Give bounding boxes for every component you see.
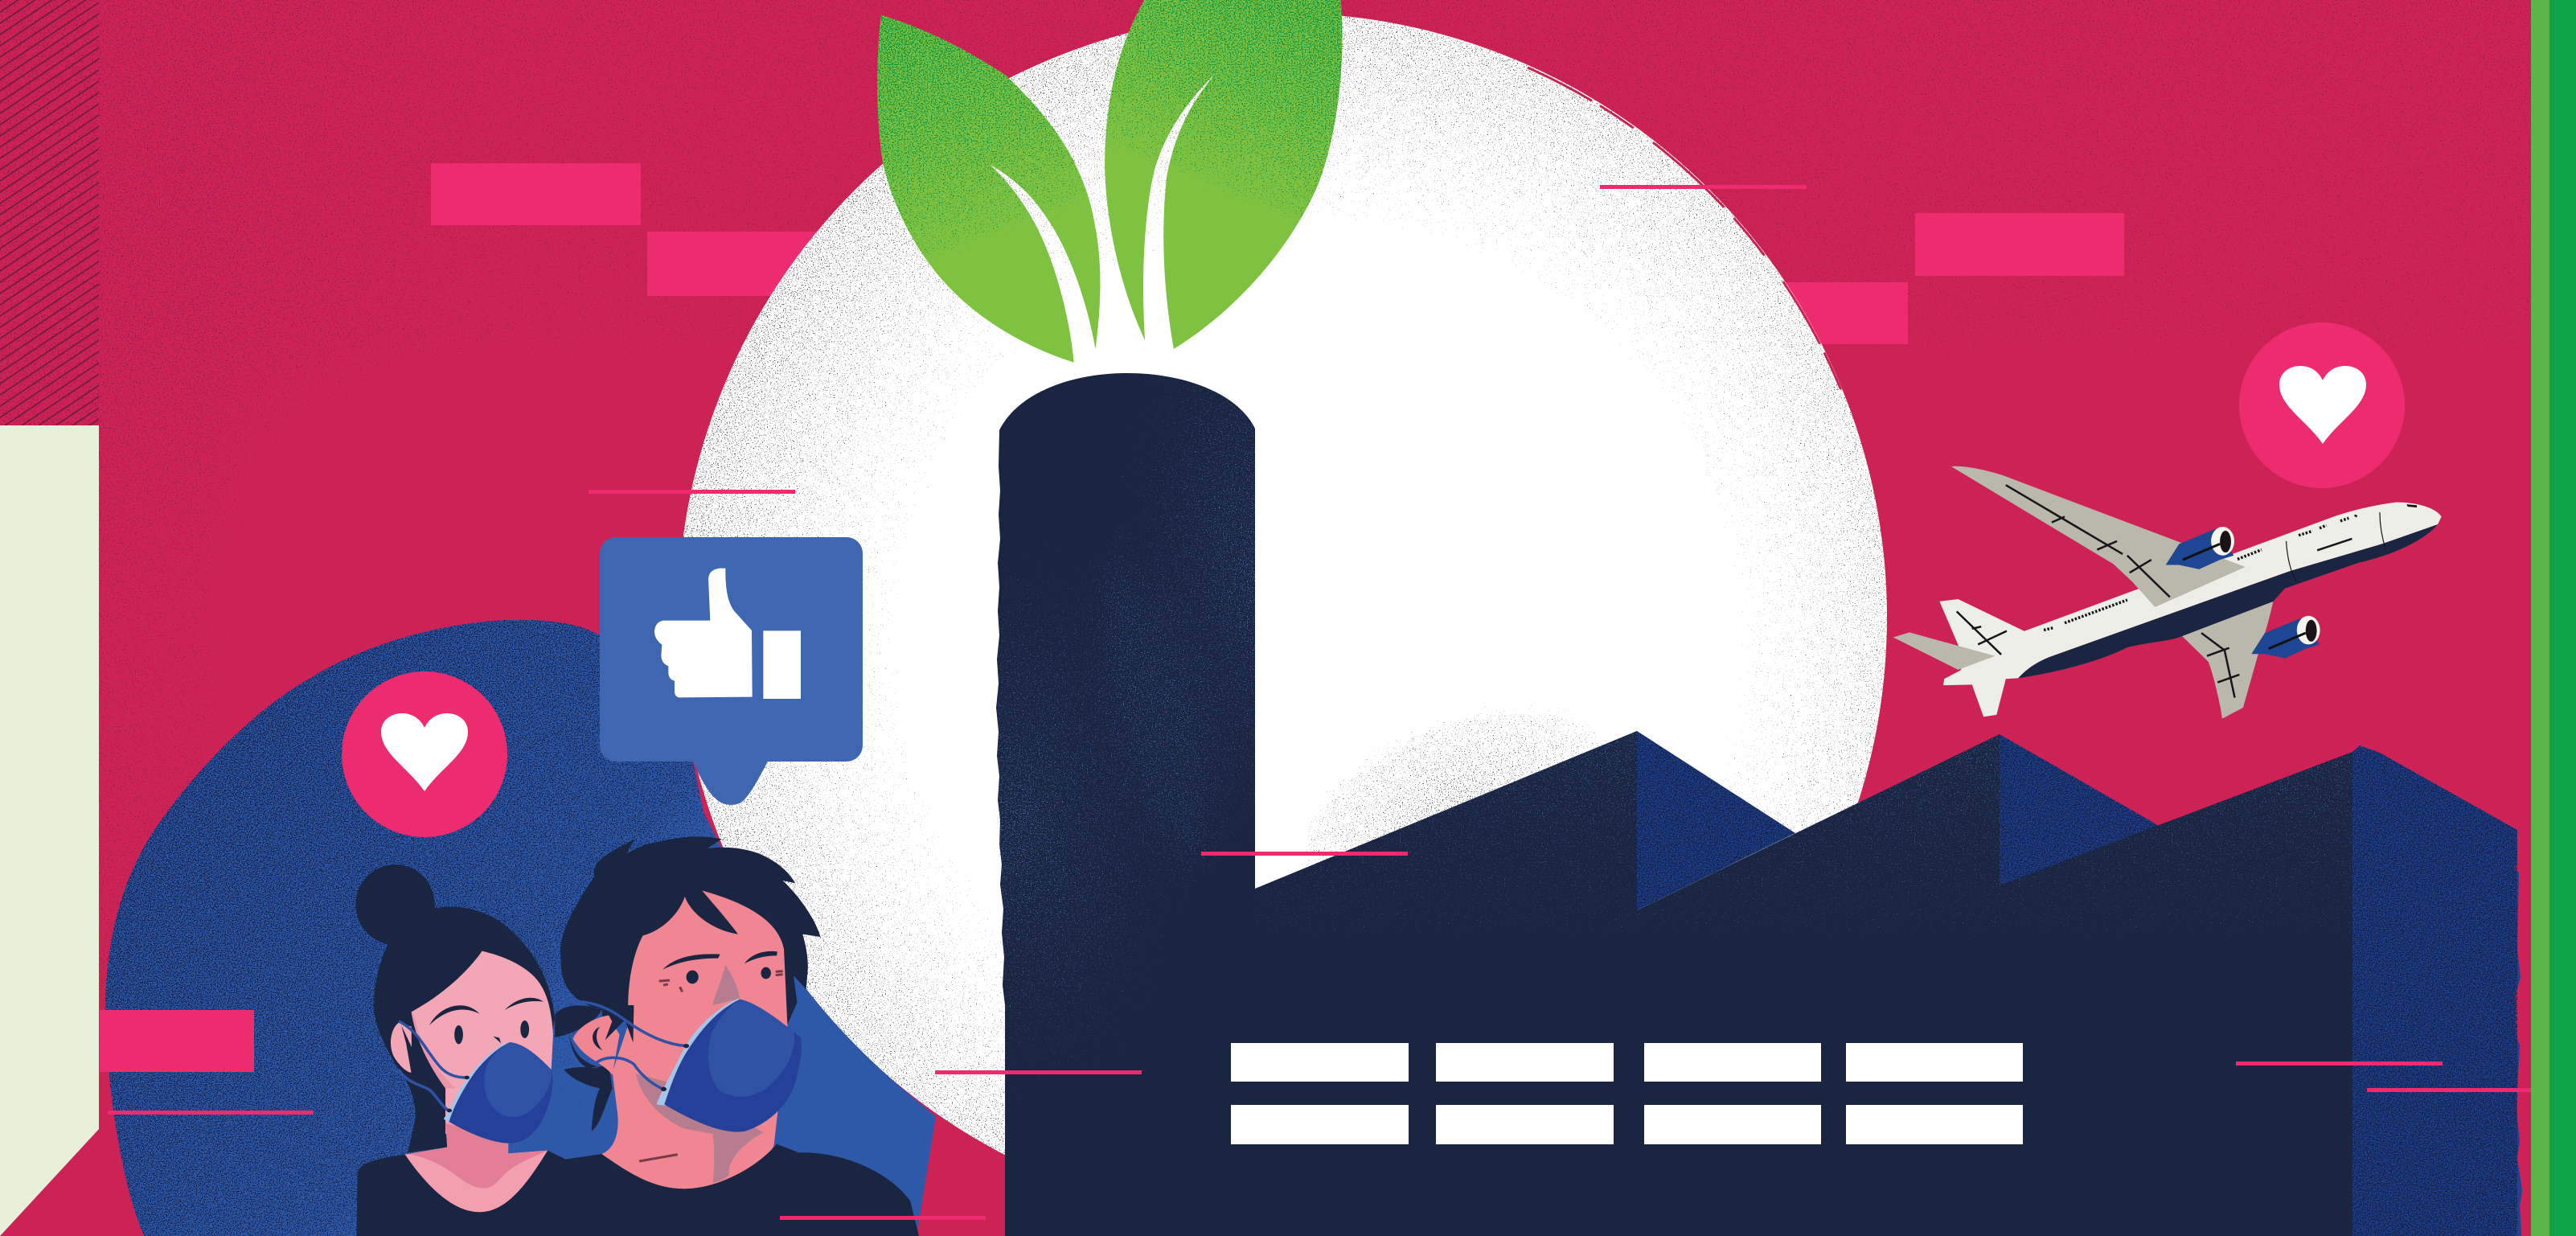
airplane: [1893, 466, 2442, 719]
man: mask: [657, 999, 802, 1131]
plane: cockpit window: [2406, 504, 2417, 507]
man: hair: [555, 836, 821, 1043]
woman: mask: [444, 1042, 552, 1144]
man: ear curve: [593, 1027, 602, 1050]
plane: upper wing: [1951, 466, 2246, 607]
man: strap rivets: [661, 1044, 689, 1091]
woman: hair: [374, 907, 555, 1152]
factory: windows: [1231, 1043, 2023, 1144]
thin pink accent lines: [108, 185, 2531, 1220]
woman: strap rivets: [447, 1076, 470, 1112]
woman: face: [412, 951, 553, 1134]
man: eyes and brows: [662, 951, 777, 983]
white sun circle: [678, 13, 1887, 1222]
woman: eyes, brows and nose: [429, 998, 544, 1044]
plane: wing and panel lines: [1957, 485, 2352, 697]
woman: chest: [405, 1118, 548, 1212]
green leaves: [877, 0, 1343, 363]
plane: horizontal stabilizer: [1893, 632, 1996, 670]
icon: heart badge right: [2239, 322, 2405, 488]
shirts: [356, 1144, 920, 1236]
icon: heart badge left: [342, 671, 507, 837]
man: nose shadow: [713, 965, 740, 1005]
woman: cheek shadow: [412, 1012, 456, 1088]
plane: tail fin: [1939, 599, 2025, 655]
hatched panel: top left: [0, 0, 99, 425]
man: mask straps: [560, 1001, 686, 1089]
factory: blue roof side panels: [1637, 731, 2522, 1236]
woman: hair strands over ear: [401, 1025, 419, 1083]
plane: fuselage: [1943, 503, 2442, 717]
man: neck shadow: [636, 1074, 763, 1183]
woman: hair bun: [355, 864, 435, 945]
plane: cabin windows: [2044, 515, 2357, 630]
man: ear: [573, 1016, 620, 1075]
right green stripes: [2531, 0, 2576, 1236]
woman: neck shadow: [408, 1123, 548, 1188]
chimney: [996, 373, 1367, 1236]
woman: ear: [391, 1023, 412, 1073]
factory: dark grain on blue panels: [1637, 731, 2517, 1236]
icon: thumbs up speech bubble: [600, 537, 863, 805]
left pink block on hill: [100, 1010, 254, 1072]
pink blocks behind the circle: [431, 163, 2124, 344]
man: front hair strands: [605, 1005, 634, 1043]
man: hair wisps by the ear: [564, 1035, 613, 1131]
people wearing masks: [355, 836, 920, 1236]
factory: building: [1005, 731, 2352, 1236]
plane: lower engine: [2251, 616, 2320, 659]
plane: upper engine: [2166, 527, 2234, 569]
plane: navy belly: [2018, 524, 2438, 678]
chimney and roof grain: [999, 377, 2352, 1101]
man: neck line and ear detail: [639, 971, 783, 1161]
man: face and neck: [601, 890, 787, 1189]
blue hill behind the people: [96, 611, 949, 1236]
cream panel: left edge: [0, 425, 99, 1236]
woman: mask straps: [399, 1021, 467, 1111]
plane: door seams: [2287, 512, 2385, 581]
plane: lower wing: [2182, 602, 2273, 719]
